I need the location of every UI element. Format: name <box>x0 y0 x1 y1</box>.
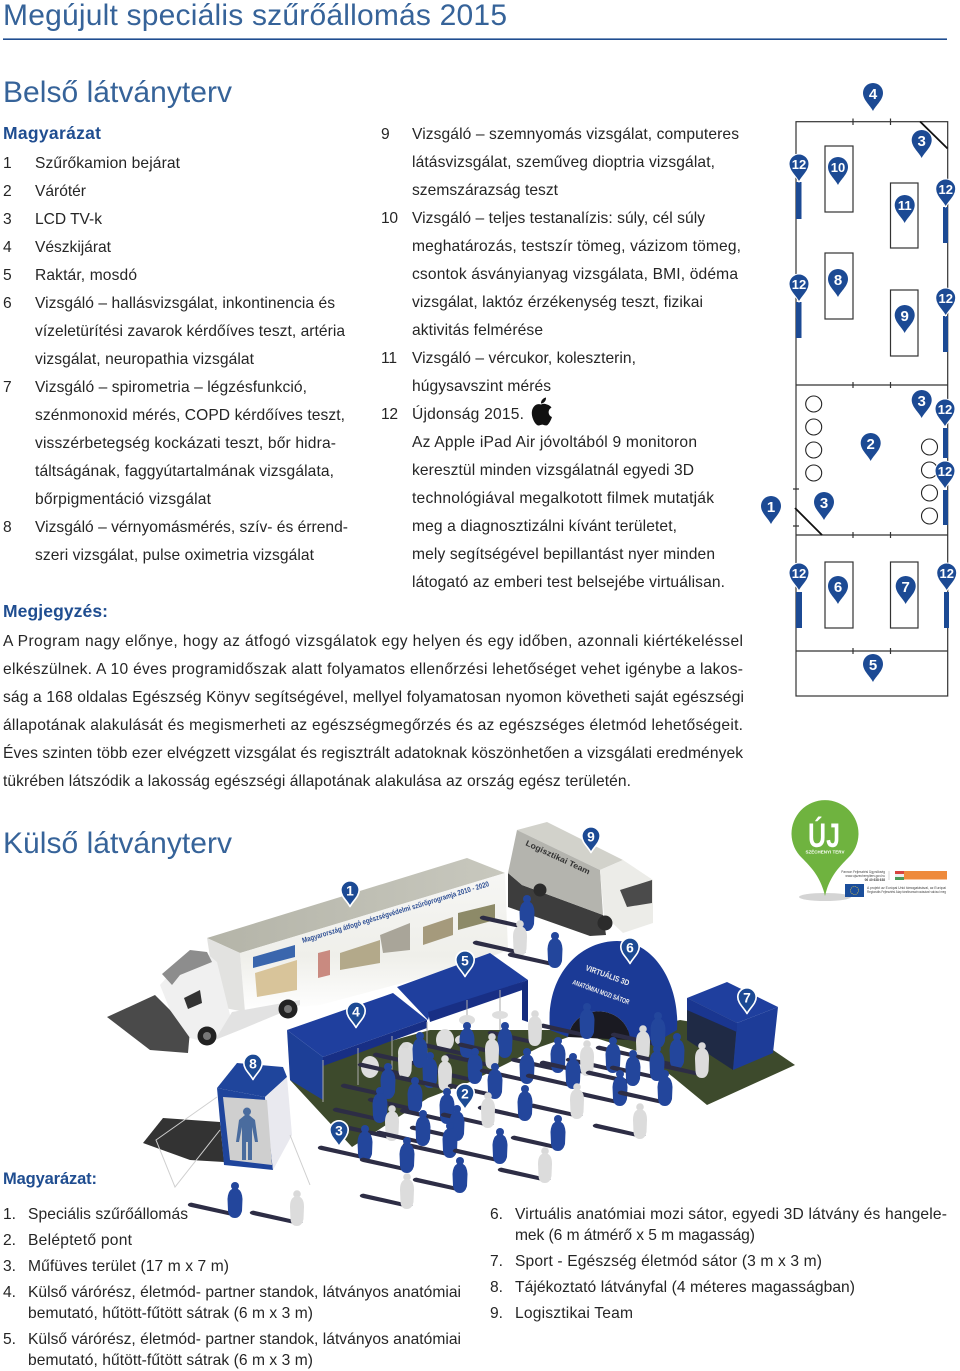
truck chassis and wheels <box>215 1000 300 1040</box>
site markers: 6 <box>626 941 634 956</box>
plan markers: 3 <box>918 133 926 150</box>
tent 4 <box>287 993 427 1102</box>
plan markers: 2 <box>867 436 875 453</box>
site markers: 1 <box>346 884 354 899</box>
legend items 1-8: Várótér <box>35 183 86 200</box>
exterior legend left: Speciális szűrőállomás <box>28 1206 188 1223</box>
funding text: A projekt az Európai Unió támogatásával, az Európai <box>867 886 946 890</box>
site markers: 4 <box>352 1005 360 1020</box>
tables <box>361 1011 508 1078</box>
exterior legend left: 5. <box>3 1331 16 1348</box>
panel: legend right column: Vizsgáló – vércukor, koleszterin, <box>412 350 636 367</box>
plan markers: 9 <box>901 308 909 325</box>
note paragraph <box>3 633 744 790</box>
legend items 1-8: szeri vizsgálat, pulse oximetria vizsgálat <box>35 547 315 564</box>
trailer artwork: Magyarország átfogó egészségvédelmi szűrőprogramja 2010 - 2020 <box>301 879 490 945</box>
panel: legend right column: 12 <box>381 406 398 423</box>
trailer side <box>240 873 508 1012</box>
legend items 1-8: 5 <box>3 267 12 284</box>
panel: exterior legend <box>3 1170 947 1369</box>
legend items 1-8: LCD TV-k <box>35 211 102 228</box>
panel: legend right column: 10 <box>381 210 398 227</box>
legend items 1-8: Vizsgáló – spirometria – légzésfunkció, <box>35 379 307 396</box>
Hungarian flag and banner <box>889 871 947 880</box>
plan markers: 12 <box>792 157 806 172</box>
floor plan <box>761 83 957 696</box>
panel: legend right column: meghatározás, testszír tömeg, vázizom tömeg, <box>412 238 741 255</box>
funding text: Regionális Fejlesztési Alap társfinanszírozásával valósul meg <box>867 890 946 894</box>
dome tent 6 <box>550 941 677 1040</box>
heading: exterior plan: Külső látványterv <box>3 827 232 860</box>
panel: legend right column: meg a diagnosztizálni kívánt területet, <box>412 518 677 535</box>
note paragraph: ság a 168 oldalas Egészség Könyv segítségével, mellyel folyamatosan nyomon követheti saját egészségi <box>3 689 744 706</box>
exterior legend right: Virtuális anatómiai mozi sátor, egyedi 3D látvány és hangele- <box>515 1206 947 1223</box>
exterior legend left <box>3 1206 461 1369</box>
plan markers: 6 <box>834 579 842 596</box>
panel: legend right column: Vizsgáló – szemnyomás vizsgálat, computeres <box>412 126 739 143</box>
note heading: Megjegyzés: <box>3 601 108 621</box>
legend items 1-8: Vészkijárat <box>35 239 112 256</box>
plan markers: 12 <box>792 566 806 581</box>
panel: legend right column: Vizsgáló – teljes testanalízis: súly, cél súly <box>412 210 705 227</box>
exterior legend left: 4. <box>3 1284 16 1301</box>
logo wordmark: ÚJ <box>808 817 840 855</box>
crowd <box>188 895 709 1226</box>
panel: legend right column: 11 <box>381 350 397 367</box>
icon: apple logo <box>532 398 552 426</box>
plan markers: 12 <box>792 277 806 292</box>
exterior legend right: 6. <box>490 1206 503 1223</box>
exterior legend left: bemutató, hűtött-fűtött sátrak (6 m x 3 m) <box>28 1352 313 1369</box>
exterior legend right: mek (6 m átmérő x 5 m magasság) <box>515 1227 755 1244</box>
exterior legend right: Tájékoztató látványfal (4 méteres magasságban) <box>515 1279 855 1296</box>
legend items 1-8: 3 <box>3 211 12 228</box>
exterior legend left: 2. <box>3 1232 16 1249</box>
legend items 1-8: szénmonoxid mérés, COPD kérdőíves teszt, <box>35 407 345 424</box>
small truck: Logisztikai Team <box>524 839 591 876</box>
small truck <box>508 822 653 936</box>
panel: legend right column: látogató az emberi test belsejébe virtuálisan. <box>412 574 725 591</box>
note paragraph: Éves szinten több ezer elvégzett vizsgálat és regisztrált adatoknak köszönhetően a vizsgálati eredmények <box>3 743 743 762</box>
site markers: 9 <box>587 830 595 845</box>
exterior legend left: bemutató, hűtött-fűtött sátrak (6 m x 3 m) <box>28 1305 313 1322</box>
legend items 1-8: 4 <box>3 239 12 256</box>
kiosk guy-lines <box>156 1097 310 1187</box>
panel: legend right column: vizsgálat, laktóz érzékenység teszt, fizikai <box>412 294 703 311</box>
funding text: 06 40 638 638 <box>865 878 885 882</box>
legend items 1-8: táltságának, faggyútartalmának vizsgálata, <box>35 463 334 480</box>
legend items 1-8: Vizsgáló – vérnyomásmérés, szív- és érrend- <box>35 519 348 536</box>
dome tent 6: ANATÓMIAI MOZI SÁTOR <box>571 977 631 1006</box>
note paragraph: elkészülnek. A 10 éves programidőszak alatt folyamatos ellenőrzési lehetőséget vehet igénybe a lakos- <box>3 661 743 678</box>
panel: legend right column: húgysavszint mérés <box>412 378 551 395</box>
site markers: 3 <box>335 1124 343 1139</box>
plan markers: 12 <box>938 182 953 197</box>
cab <box>160 952 232 1042</box>
info kiosk 8 <box>217 1063 292 1170</box>
site markers: 7 <box>743 991 751 1006</box>
legend items 1-8: visszérbetegség kockázati teszt, bőr hidra- <box>35 435 336 452</box>
logo: Új Széchenyi Terv: SZÉCHENYI TERV <box>806 848 844 854</box>
legend items 1-8: bőrpigmentáció vizsgálat <box>35 491 212 508</box>
plan markers: 3 <box>918 393 926 410</box>
plan markers: 12 <box>938 464 952 479</box>
panel: note <box>3 601 744 790</box>
exterior legend left: 1. <box>3 1206 16 1223</box>
title rule <box>3 38 947 40</box>
plan markers: 12 <box>939 566 954 581</box>
exterior legend right <box>490 1206 947 1322</box>
legend items 1-8: 1 <box>3 155 12 172</box>
tent 7 <box>687 982 778 1070</box>
funding text <box>841 870 946 894</box>
site markers: 2 <box>461 1087 469 1102</box>
panel: legend right column: szemszárazság teszt <box>412 182 559 199</box>
legend items 1-8: 6 <box>3 295 12 312</box>
legend items 1-8: vízeletürítési zavarok kérdőíves teszt, artéria <box>35 323 345 340</box>
plan markers: 12 <box>938 402 952 417</box>
exterior legend right: 9. <box>490 1305 503 1322</box>
exterior legend right: 8. <box>490 1279 503 1296</box>
panel: legend right column: mely segítségével bepillantást nyer minden <box>412 546 715 563</box>
legend items 1-8: 7 <box>3 379 12 396</box>
panel: legend right column: Az Apple iPad Air jóvoltából 9 monitoron <box>412 434 697 451</box>
panel: legend right column: technológiával megalkotott filmek mutatják <box>412 490 714 507</box>
green pin <box>791 800 858 896</box>
site markers: 5 <box>461 954 469 969</box>
site markers: 8 <box>249 1057 257 1072</box>
note paragraph: tükrében látszódik a lakosság egészségi állapotának alakulása az ország egész területén. <box>3 773 631 790</box>
exterior legend left: 3. <box>3 1258 16 1275</box>
waiting room seats <box>806 396 938 524</box>
funding text: Pannon Fejlesztési Ügynökség <box>841 870 885 874</box>
logo: Új Széchenyi Terv <box>791 800 947 901</box>
exterior legend left: Külső várórész, életmód- partner standok, látványos anatómiai <box>28 1284 461 1301</box>
illustration: exterior site <box>107 822 795 1226</box>
panel: legend right column: Újdonság 2015. <box>412 404 524 423</box>
panel: legend right column: 9 <box>381 126 390 143</box>
panel: legend right column: keresztül minden vizsgálatnál egyedi 3D <box>412 462 694 479</box>
exterior legend heading: Magyarázat: <box>3 1170 97 1188</box>
EU flag <box>845 884 864 897</box>
panel: legend right column: csontok ásványianyag vizsgálata, BMI, ödéma <box>412 266 738 283</box>
panel: legend right column: látásvizsgálat, szeműveg dioptria vizsgálat, <box>412 154 715 171</box>
legend items 1-8 <box>3 155 348 564</box>
panel: legend left column <box>3 123 348 564</box>
funding text: www.ujszechenyiterv.gov.hu <box>845 874 885 878</box>
plan markers: 11 <box>898 198 912 213</box>
note paragraph: állapotának alakulását és megismerheti az egészségmegőrzés és az egészséges életmód lehetőségeit. <box>3 717 743 734</box>
exterior legend left: Külső várórész, életmód- partner standok, látványos anatómiai <box>28 1331 461 1348</box>
trailer roof <box>207 858 505 953</box>
doors <box>795 122 948 535</box>
legend items 1-8: Vizsgáló – hallásvizsgálat, inkontinencia és <box>35 295 335 312</box>
truck shadow and kiosk shadow <box>107 995 190 1053</box>
plan markers: 5 <box>869 657 877 674</box>
panel: legend right column: aktivitás felmérése <box>412 322 543 339</box>
main truck <box>160 858 508 1046</box>
exterior legend left: Műfüves terület (17 m x 7 m) <box>28 1258 229 1275</box>
plan markers: 8 <box>834 272 842 289</box>
exterior legend right: Logisztikai Team <box>515 1305 633 1322</box>
heading: interior plan: Belső látványterv <box>3 76 232 109</box>
legend items 1-8: Szűrőkamion bejárat <box>35 155 181 172</box>
plan markers: 3 <box>820 495 828 512</box>
exterior legend right: 7. <box>490 1253 503 1270</box>
legend items 1-8: vizsgálat, neuropathia vizsgálat <box>35 351 255 368</box>
plan markers: 10 <box>831 160 845 175</box>
legend items 1-8: Raktár, mosdó <box>35 267 137 284</box>
legend items 1-8: 2 <box>3 183 12 200</box>
lawn <box>290 1020 795 1147</box>
trailer front <box>207 938 245 1012</box>
plan markers: 4 <box>869 86 878 103</box>
note paragraph: A Program nagy előnye, hogy az átfogó vizsgálatok egy helyen és egy időben, azonnali kiértékeléssel <box>3 633 743 650</box>
dome tent 6: VIRTUÁLIS 3D <box>584 963 631 988</box>
monitors <box>796 182 949 628</box>
plan markers: 12 <box>938 291 953 306</box>
legend heading: Magyarázat <box>3 123 101 143</box>
trailer artwork <box>253 879 495 997</box>
logo shadow <box>799 893 851 901</box>
site markers <box>244 827 756 1147</box>
exterior legend right: Sport - Egészség életmód sátor (3 m x 3 m) <box>515 1253 822 1270</box>
exterior legend left: Beléptető pont <box>28 1232 133 1249</box>
floor plan walls <box>793 118 948 696</box>
tent 5 <box>397 953 528 1040</box>
legend items 1-8: 8 <box>3 519 12 536</box>
plan markers: 1 <box>767 499 775 516</box>
plan markers: 7 <box>902 579 910 596</box>
plan markers <box>761 83 957 682</box>
panel: legend right column <box>381 126 741 591</box>
